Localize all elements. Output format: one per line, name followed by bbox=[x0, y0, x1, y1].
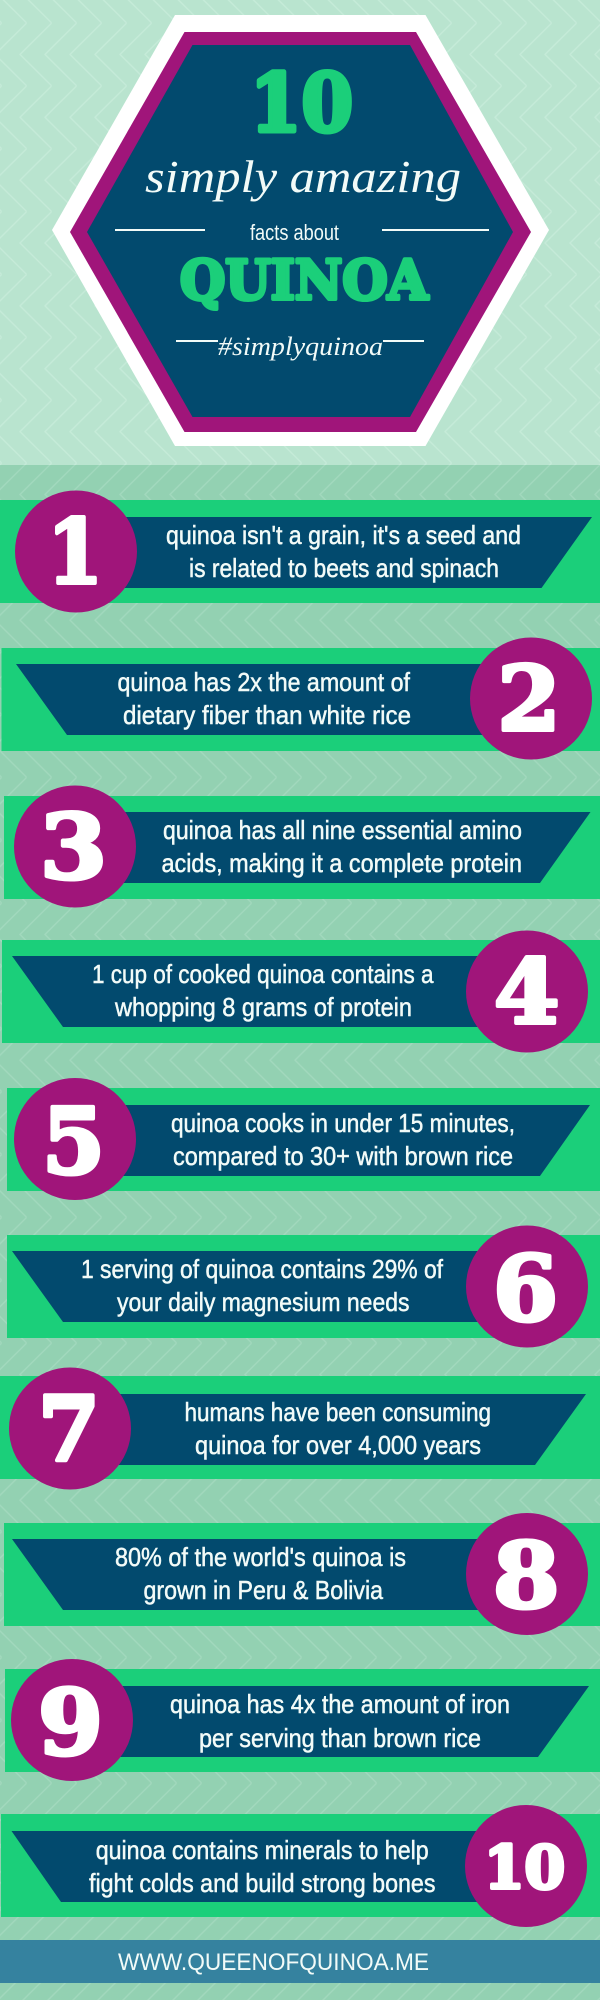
fact 6 text bbox=[81, 1254, 444, 1317]
fact 5 text bbox=[171, 1108, 515, 1171]
footer url: WWW.QUEENOFQUINOA.ME bbox=[118, 1949, 429, 1976]
fact 1 text bbox=[166, 520, 521, 583]
fact 8 text: grown in Peru & Bolivia bbox=[144, 1575, 383, 1605]
fact 10 text: quinoa contains minerals to help bbox=[96, 1835, 429, 1865]
number 7: 7 bbox=[38, 1376, 100, 1481]
fact 2 bbox=[2, 638, 600, 760]
number 10: 10 bbox=[484, 1833, 565, 1902]
fact 5 text: quinoa cooks in under 15 minutes, bbox=[171, 1108, 515, 1138]
fact 3 bbox=[4, 786, 600, 908]
fact 10 text bbox=[89, 1835, 436, 1898]
number 6: 6 bbox=[493, 1236, 558, 1342]
fact 3 text bbox=[162, 815, 522, 878]
number 8: 8 bbox=[493, 1523, 560, 1629]
fact 8 text: 80% of the world's quinoa is bbox=[115, 1542, 406, 1572]
fact 9 text: per serving than brown rice bbox=[199, 1723, 481, 1753]
fact 9 text: quinoa has 4x the amount of iron bbox=[170, 1689, 510, 1719]
number 3: 3 bbox=[40, 794, 107, 899]
fact 4 bbox=[2, 930, 600, 1052]
number 2: 2 bbox=[498, 646, 560, 751]
subtitle: simply amazing: simply amazing bbox=[145, 151, 461, 202]
fact 5 text: compared to 30+ with brown rice bbox=[173, 1141, 513, 1171]
fact 3 text: quinoa has all nine essential amino bbox=[163, 815, 522, 845]
number 9: 9 bbox=[38, 1670, 103, 1776]
title: 10: 10 bbox=[250, 56, 353, 150]
fact 1 bbox=[0, 490, 600, 612]
fact 10 bbox=[1, 1805, 600, 1927]
fact 7 text: quinoa for over 4,000 years bbox=[195, 1430, 481, 1460]
fact 2 text: quinoa has 2x the amount of bbox=[118, 667, 411, 697]
fact 4 text: whopping 8 grams of protein bbox=[114, 992, 412, 1022]
fact 2 text bbox=[118, 667, 411, 730]
fact 8 bbox=[4, 1513, 600, 1635]
divider right bbox=[382, 229, 489, 231]
fact 6 text: 1 serving of quinoa contains 29% of bbox=[81, 1254, 444, 1284]
title: QUINOA: QUINOA bbox=[180, 248, 429, 312]
number 4: 4 bbox=[494, 939, 560, 1044]
hashtag line right bbox=[383, 340, 424, 342]
fact 3 text: acids, making it a complete protein bbox=[162, 848, 522, 878]
fact 8 text bbox=[115, 1542, 406, 1605]
fact 7 text: humans have been consuming bbox=[184, 1397, 491, 1427]
fact 5 bbox=[7, 1078, 600, 1200]
fact 2 text: dietary fiber than white rice bbox=[123, 700, 411, 730]
hashtag: #simplyquinoa: #simplyquinoa bbox=[218, 332, 383, 361]
fact 1 text: quinoa isn't a grain, it's a seed and bbox=[166, 520, 521, 550]
fact 1 text: is related to beets and spinach bbox=[189, 553, 499, 583]
fact 7 text bbox=[184, 1397, 491, 1460]
fact 10 text: fight colds and build strong bones bbox=[89, 1868, 436, 1898]
number 5: 5 bbox=[42, 1089, 105, 1195]
footer bar bbox=[0, 1940, 600, 1983]
header hexagon badge bbox=[52, 15, 549, 446]
fact 6 bbox=[7, 1226, 600, 1348]
subtitle: facts about: facts about bbox=[250, 220, 339, 245]
divider left bbox=[115, 229, 205, 231]
fact 9 text bbox=[170, 1689, 510, 1753]
hashtag line left bbox=[176, 340, 218, 342]
fact 4 text bbox=[92, 959, 434, 1022]
fact 7 bbox=[0, 1368, 600, 1490]
fact 4 text: 1 cup of cooked quinoa contains a bbox=[92, 959, 434, 989]
fact 6 text: your daily magnesium needs bbox=[117, 1287, 410, 1317]
fact 9 bbox=[5, 1659, 600, 1781]
number 1: 1 bbox=[47, 499, 103, 604]
